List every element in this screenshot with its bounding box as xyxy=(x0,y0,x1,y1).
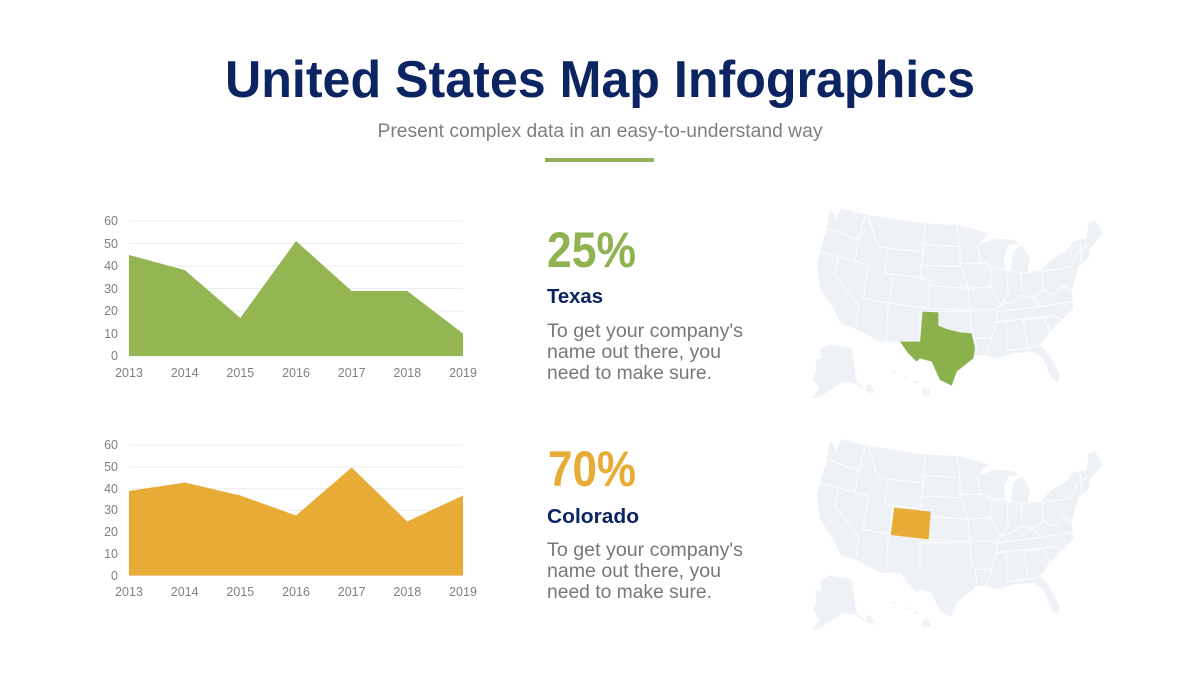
area chart: Texas: 20 xyxy=(104,304,118,318)
area chart: Texas: 50 xyxy=(104,237,118,251)
area chart: Texas: 2014 xyxy=(171,366,199,380)
area chart: Colorado: 0 xyxy=(111,569,118,583)
area chart: Colorado: 2014 xyxy=(171,585,199,599)
stat: Colorado xyxy=(547,441,743,603)
area chart: Colorado: 60 xyxy=(104,438,118,452)
area chart: Texas: 2016 xyxy=(282,366,310,380)
area chart: Colorado: 2017 xyxy=(338,585,366,599)
area chart: Texas: 2013 xyxy=(115,366,143,380)
description: Texas: To get your company's xyxy=(547,321,743,342)
percentage: 25%: 25% xyxy=(547,222,636,278)
state highlight: Texas xyxy=(900,312,975,386)
area chart: Texas: 2017 xyxy=(338,366,366,380)
accent divider xyxy=(545,158,654,162)
area chart: Texas: 2019 xyxy=(449,366,477,380)
area chart: Texas: 40 xyxy=(104,259,118,273)
area chart: Colorado: 40 xyxy=(104,482,118,496)
subtitle: Present complex data in an easy-to-understand way xyxy=(378,121,823,142)
title: United States Map Infographics xyxy=(225,51,975,109)
description: Texas: need to make sure. xyxy=(547,363,712,384)
description: Colorado: name out there, you xyxy=(547,561,721,582)
area chart: Colorado: 2013 xyxy=(115,585,143,599)
area chart: Colorado xyxy=(104,438,477,599)
description: Colorado: need to make sure. xyxy=(547,582,712,603)
area chart: Texas: 10 xyxy=(104,327,118,341)
map: Texas highlighted xyxy=(812,208,1103,398)
percentage: 70%: 70% xyxy=(548,441,636,497)
state highlight: Colorado xyxy=(891,508,931,539)
area chart: Texas: 30 xyxy=(104,282,118,296)
area chart: Texas: 2015 xyxy=(226,366,254,380)
area chart: Colorado: 10 xyxy=(104,547,118,561)
area chart: Colorado: 30 xyxy=(104,503,118,517)
area chart: Texas: 0 xyxy=(111,349,118,363)
area chart: Colorado: 2018 xyxy=(393,585,421,599)
description: Colorado xyxy=(547,540,743,603)
area chart: Texas xyxy=(104,214,477,380)
area chart: Colorado: 20 xyxy=(104,525,118,539)
area chart: Colorado: 2016 xyxy=(282,585,310,599)
map: Colorado highlighted xyxy=(812,439,1103,629)
description: Texas: name out there, you xyxy=(547,342,721,363)
description: Texas xyxy=(547,321,743,384)
state name: Colorado: Colorado xyxy=(547,506,639,528)
stat: Texas xyxy=(547,222,743,384)
area chart: Colorado: 2019 xyxy=(449,585,477,599)
area chart: Colorado: 50 xyxy=(104,460,118,474)
description: Colorado: To get your company's xyxy=(547,540,743,561)
state name: Texas: Texas xyxy=(547,286,603,308)
area chart: Texas: 60 xyxy=(104,214,118,228)
area chart: Colorado: 2015 xyxy=(226,585,254,599)
area chart: Texas: 2018 xyxy=(393,366,421,380)
